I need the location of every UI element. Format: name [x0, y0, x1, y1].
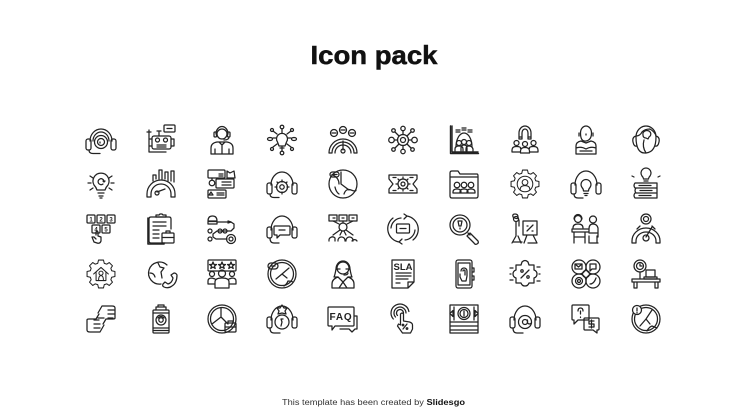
icon: handshake with thumbs	[87, 306, 115, 332]
icon: magnifier with exclamation	[450, 215, 478, 244]
title: Icon pack	[310, 40, 438, 70]
icon: question and dollar chat bubbles	[572, 305, 599, 333]
icon: puzzle with percent	[510, 260, 540, 286]
icon: female support agent	[332, 261, 354, 288]
icon: hub with bulb	[268, 125, 296, 155]
icon: FAQ speech bubble	[328, 307, 357, 332]
icon: desk with clock and laptop	[632, 260, 660, 288]
icon: head with speech mark	[633, 126, 659, 153]
icon: tin with headset label	[153, 305, 169, 333]
icon: presentation easel with person	[512, 214, 537, 243]
icon: numbered keypad with hand: 2	[99, 218, 103, 224]
icon: clock with briefcase	[208, 305, 236, 333]
icon: SLA document: SLA	[394, 262, 413, 273]
icon: desk meeting with two people	[572, 214, 598, 243]
icon: globe with telephone	[149, 262, 177, 288]
icon: smartphone with touch	[456, 260, 474, 288]
icon: headset with gear	[267, 172, 297, 198]
icon: headset with bulb	[571, 171, 601, 198]
icon: gauge with target	[632, 214, 660, 243]
icon: headset with chat bubble	[267, 216, 297, 243]
icon: globe clock	[329, 170, 357, 198]
icon: feedback panels	[208, 170, 235, 198]
icon: star rated team	[208, 260, 236, 288]
icon: satisfaction gauge	[329, 126, 357, 153]
icon: idea bulb with rays	[88, 173, 114, 198]
icon: hub network	[389, 126, 417, 154]
icon: banknote stack	[450, 305, 478, 333]
icon: gear with person	[511, 170, 539, 198]
icon: clipboard with briefcase	[148, 214, 174, 244]
icon: process flow	[208, 216, 236, 244]
icon: numbered keypad with hand: 5	[104, 228, 108, 234]
icon: folder with team	[450, 171, 478, 198]
icon: support agent	[211, 126, 233, 154]
icon: touch gesture with percent	[391, 304, 412, 333]
icon: four communication channels	[572, 260, 600, 288]
icon: support organisation tree	[329, 215, 357, 241]
icon: refresh arrows around bubble	[388, 214, 418, 244]
icon: speedometer with bars	[147, 170, 175, 197]
icon: numbered keypad with hand: 4	[94, 228, 98, 234]
icon: numbered keypad with hand: 3	[109, 218, 113, 224]
icon: books with bulb	[632, 168, 660, 198]
icon: ticket with gear	[389, 175, 417, 193]
icon: person with crossed arms	[576, 126, 596, 154]
icon: numbered keypad with hand: 1	[89, 218, 93, 224]
icon: headset with at sign	[510, 306, 540, 333]
icon: magnet attracting people	[512, 126, 538, 153]
icon: clock with telephone and alert	[632, 305, 660, 333]
footer credit: This template has been created by Slidesgo	[282, 398, 465, 407]
icon: chart with audience	[450, 126, 478, 154]
icon: headset with coin	[86, 129, 116, 154]
icon: gear with house	[87, 260, 115, 288]
icon: SLA document	[392, 260, 414, 288]
icon: robot with speech bubble	[147, 125, 175, 152]
icon: clock with telephone	[268, 260, 296, 288]
icon: headset with star badge	[267, 305, 297, 333]
icon: numbered keypad with hand	[87, 215, 115, 243]
icon: FAQ speech bubble: FAQ	[330, 312, 352, 323]
